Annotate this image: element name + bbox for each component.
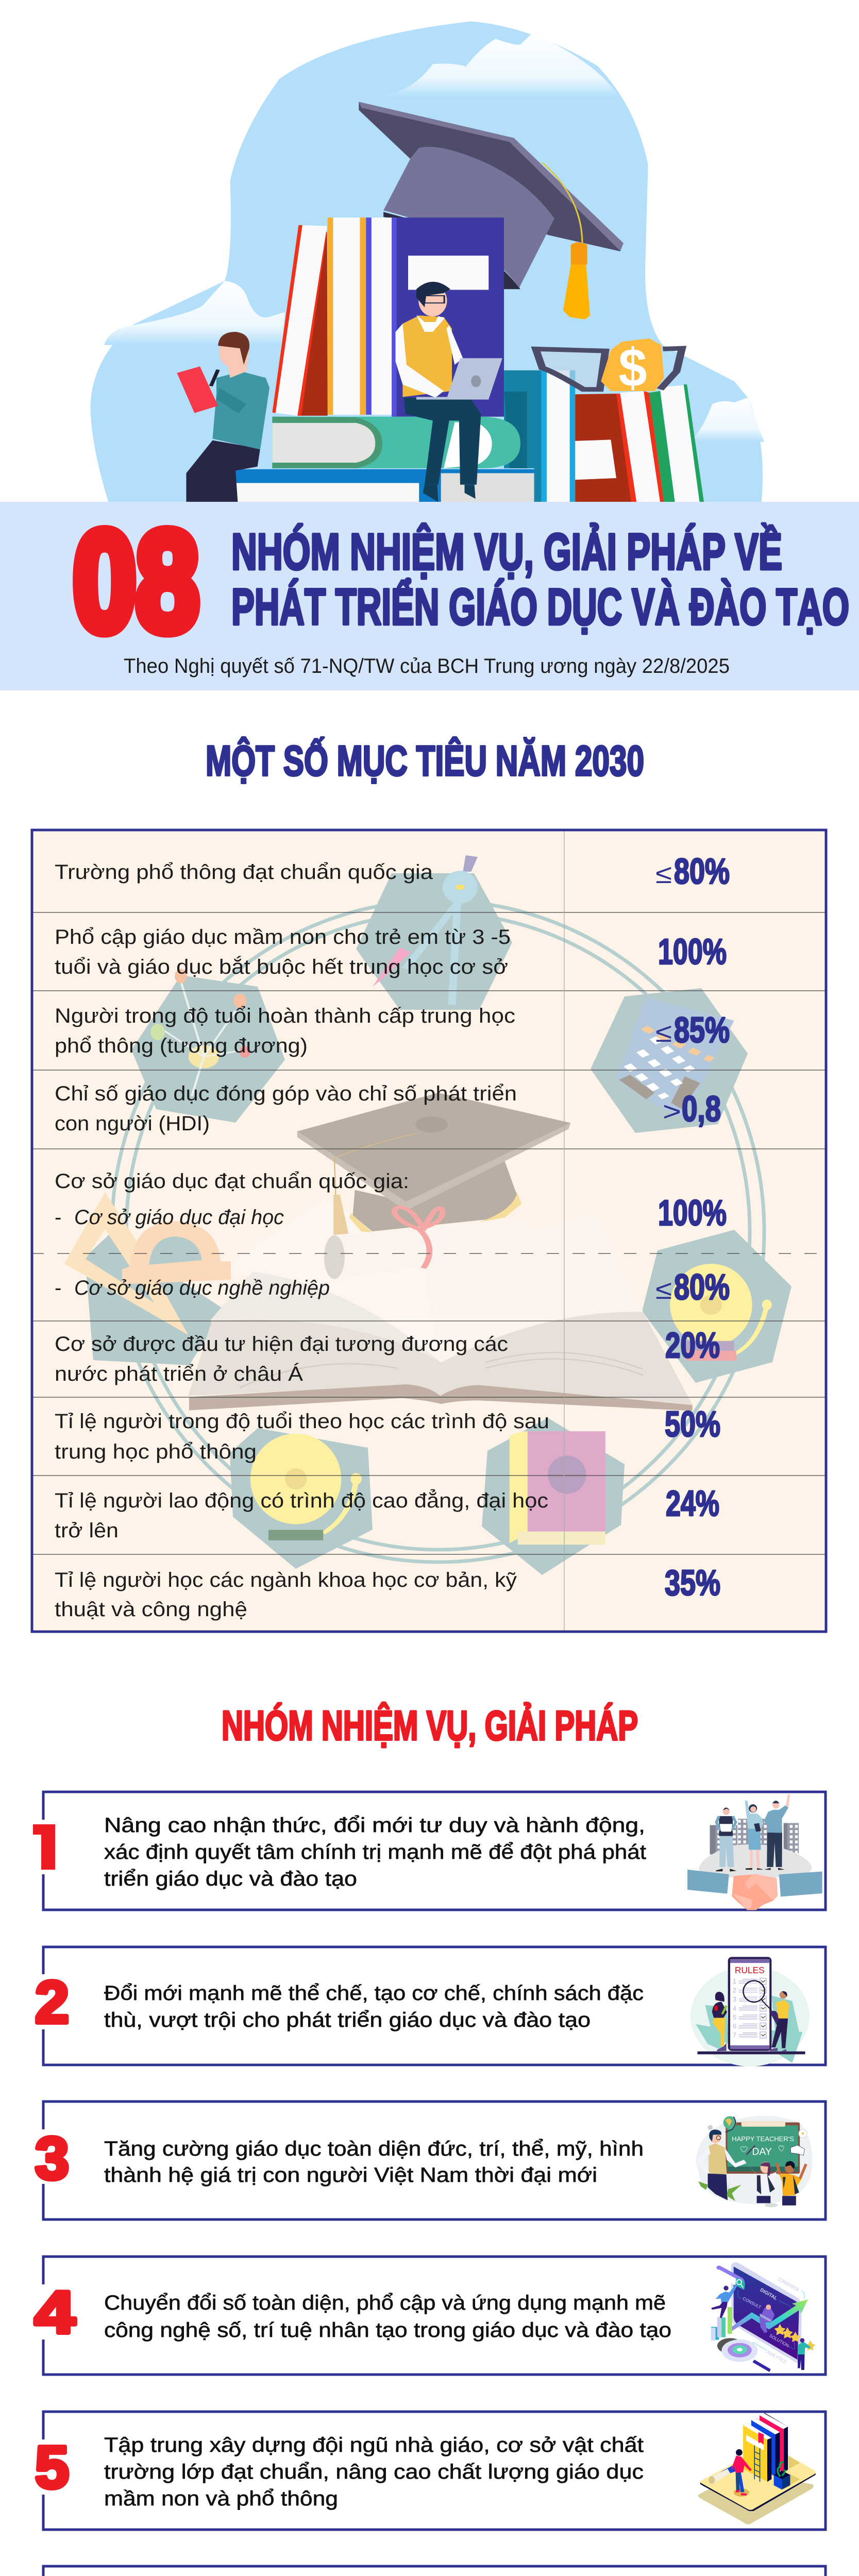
table grid lines [31,831,827,1631]
glasses and coin: $ [618,337,647,398]
title text [231,523,849,635]
watermark rings [112,901,764,1562]
heading: tasks: NHÓM NHIỆM VỤ, GIẢI PHÁP [222,1702,638,1749]
table row texts: Cơ sở giáo dục đại học [74,1206,284,1229]
icon: rules phone: 2 [733,1987,736,1994]
table row texts: Phổ cập giáo dục mầm non cho trẻ em từ 3 -5 [55,926,511,948]
task 2 text: thù, vượt trội cho phát triển giáo dục và đào tạo [104,2009,591,2031]
task 1 text: Nâng cao nhận thức, đổi mới tư duy và hành động, [104,1814,645,1837]
task 2 text: Đổi mới mạnh mẽ thể chế, tạo cơ chế, chính sách đặc [104,1982,644,2005]
table row texts: Cơ sở giáo dục nghề nghiệp [74,1277,330,1299]
table row texts: nước phát triển ở châu Á [55,1362,303,1385]
heading: targets: MỘT SỐ MỤC TIÊU NĂM 2030 [206,737,644,785]
table row texts: Trường phổ thông đạt chuẩn quốc gia [55,861,433,884]
panel: task 6 [35,2566,826,2576]
icon: rules phone: 5 [733,2013,736,2021]
watermark: ruler and protractor [64,1192,231,1335]
icon: rules phone: 1 [733,1977,736,1985]
icon: people and handshake [687,1794,822,1910]
icon: digital transformation: CONVERSION [777,2277,800,2293]
icon: rules phone: 7 [733,2031,736,2039]
table values: 50% [665,1404,720,1444]
table values: 100% [658,931,727,972]
title band [0,502,859,690]
table values: 20% [665,1325,720,1365]
hero illustration [90,21,764,502]
icon: digital transformation: ANALYTICS [766,2349,787,2365]
table values: ≤ [655,859,672,889]
task 2 text [104,1982,644,2031]
icon: teacher at blackboard [696,2116,813,2207]
table row texts: Cơ sở được đầu tư hiện đại tương đương các [55,1333,508,1355]
number 4: 4 [35,2279,75,2346]
big number 08: 08 [73,502,199,660]
icon: rules phone: RULES [735,1965,765,1975]
stack of books [208,217,704,502]
icon: digital transformation: SOLUTION [768,2333,790,2348]
clouds [104,33,764,442]
table values: 0,8 [682,1089,721,1129]
watermark: open book, scroll and cap [188,1093,693,1411]
task 3 text: Tăng cường giáo dục toàn diện đức, trí, thể, mỹ, hình [104,2138,644,2160]
icon: rules phone: 3 [733,1995,736,2003]
number 1 [33,1824,55,1870]
table watermark [64,855,791,1575]
table row texts: - [55,1206,61,1229]
panel: task 5 [35,2412,826,2530]
table frame [32,830,826,1632]
icon: rules phone: 4 [733,2004,736,2012]
table row texts: phổ thông (tương đương) [55,1035,308,1057]
number 5: 5 [35,2434,69,2501]
icon: rules phone: 6 [733,2022,736,2030]
task 4 text [104,2292,671,2342]
blue blob background [90,21,763,502]
table row texts: Chỉ số giáo dục đóng góp vào chỉ số phát triển [55,1082,517,1105]
table row texts: - [55,1277,61,1299]
icon: teacher at blackboard: DAY [752,2146,772,2158]
table values: ≤ [655,1275,672,1305]
watermark: calculator [616,997,734,1118]
task 3 text: thành hệ giá trị con người Việt Nam thời đại mới [104,2164,597,2187]
task 5 text: Tập trung xây dựng đội ngũ nhà giáo, cơ sở vật chất [104,2434,644,2456]
table row texts: Người trong độ tuổi hoàn thành cấp trung học [55,1005,515,1027]
panel: task 4 [35,2257,826,2375]
table values: 24% [666,1483,719,1523]
panel: task 3 [35,2102,826,2219]
task 1 text [104,1814,646,1890]
icon: books on platform [698,2413,816,2524]
subtitle: Theo Nghị quyết số 71-NQ/TW của BCH Trung ương ngày 22/8/2025 [124,655,730,677]
task 5 text [104,2434,644,2510]
watermark hexagons [85,873,791,1575]
table values: 80% [674,1267,730,1307]
table values [655,851,730,1603]
table values: 85% [674,1010,730,1050]
task 3 text [104,2138,644,2187]
table row texts: thuật và công nghệ [55,1598,247,1621]
watermark: compass [373,855,478,1005]
table row texts: con người (HDI) [55,1112,210,1135]
icon: digital transformation [711,2262,815,2372]
table row texts: Tỉ lệ người học các ngành khoa học cơ bản, kỹ [55,1569,517,1591]
panel: task 1 [33,1792,826,1910]
number 3: 3 [35,2125,69,2192]
task 4 text: công nghệ số, trí tuệ nhân tạo trong giáo dục và đào tạo [104,2319,671,2342]
task 5 text: trường lớp đạt chuẩn, nâng cao chất lượng giáo dục [104,2461,644,2483]
table row texts: Tỉ lệ người lao động có trình độ cao đẳng, đại học [55,1488,548,1512]
icon: rules phone [690,1957,810,2066]
table row texts: Tỉ lệ người trong độ tuổi theo học các trình độ sau [55,1410,549,1433]
number 2: 2 [35,1969,69,2036]
table values: 80% [674,851,730,891]
watermark: bells and book [250,1264,772,1545]
table row texts: tuổi và giáo dục bắt buộc hết trung học cơ sở [55,955,508,978]
table values: 35% [665,1563,720,1603]
table values: > [663,1097,681,1127]
table row texts: Cơ sở giáo dục đạt chuẩn quốc gia: [55,1170,409,1193]
table row texts [55,861,549,1621]
icon: digital transformation: DIGITAL [760,2287,779,2301]
person with laptop [396,282,502,502]
icon: digital transformation: CONSULT [742,2296,762,2310]
task 4 text: Chuyển đổi số toàn diện, phổ cập và ứng dụng mạnh mẽ [104,2292,666,2314]
panel: targets table [31,829,827,1633]
table values: 100% [658,1193,727,1233]
icon: teacher at blackboard: HAPPY TEACHER'S [732,2135,794,2143]
glasses and coin [536,337,682,398]
person reading [177,332,270,502]
table values: ≤ [655,1018,672,1048]
task 5 text: mầm non và phổ thông [104,2487,338,2510]
task 1 text: xác định quyết tâm chính trị mạnh mẽ để đột phá phát [104,1841,646,1863]
panel: task 2 [35,1947,826,2066]
graduation cap [359,102,624,319]
table row texts: trung học phổ thông [55,1440,257,1463]
watermark: atom [150,969,250,1096]
table row texts: trở lên [55,1519,119,1542]
task 1 text: triển giáo dục và đào tạo [104,1868,357,1890]
